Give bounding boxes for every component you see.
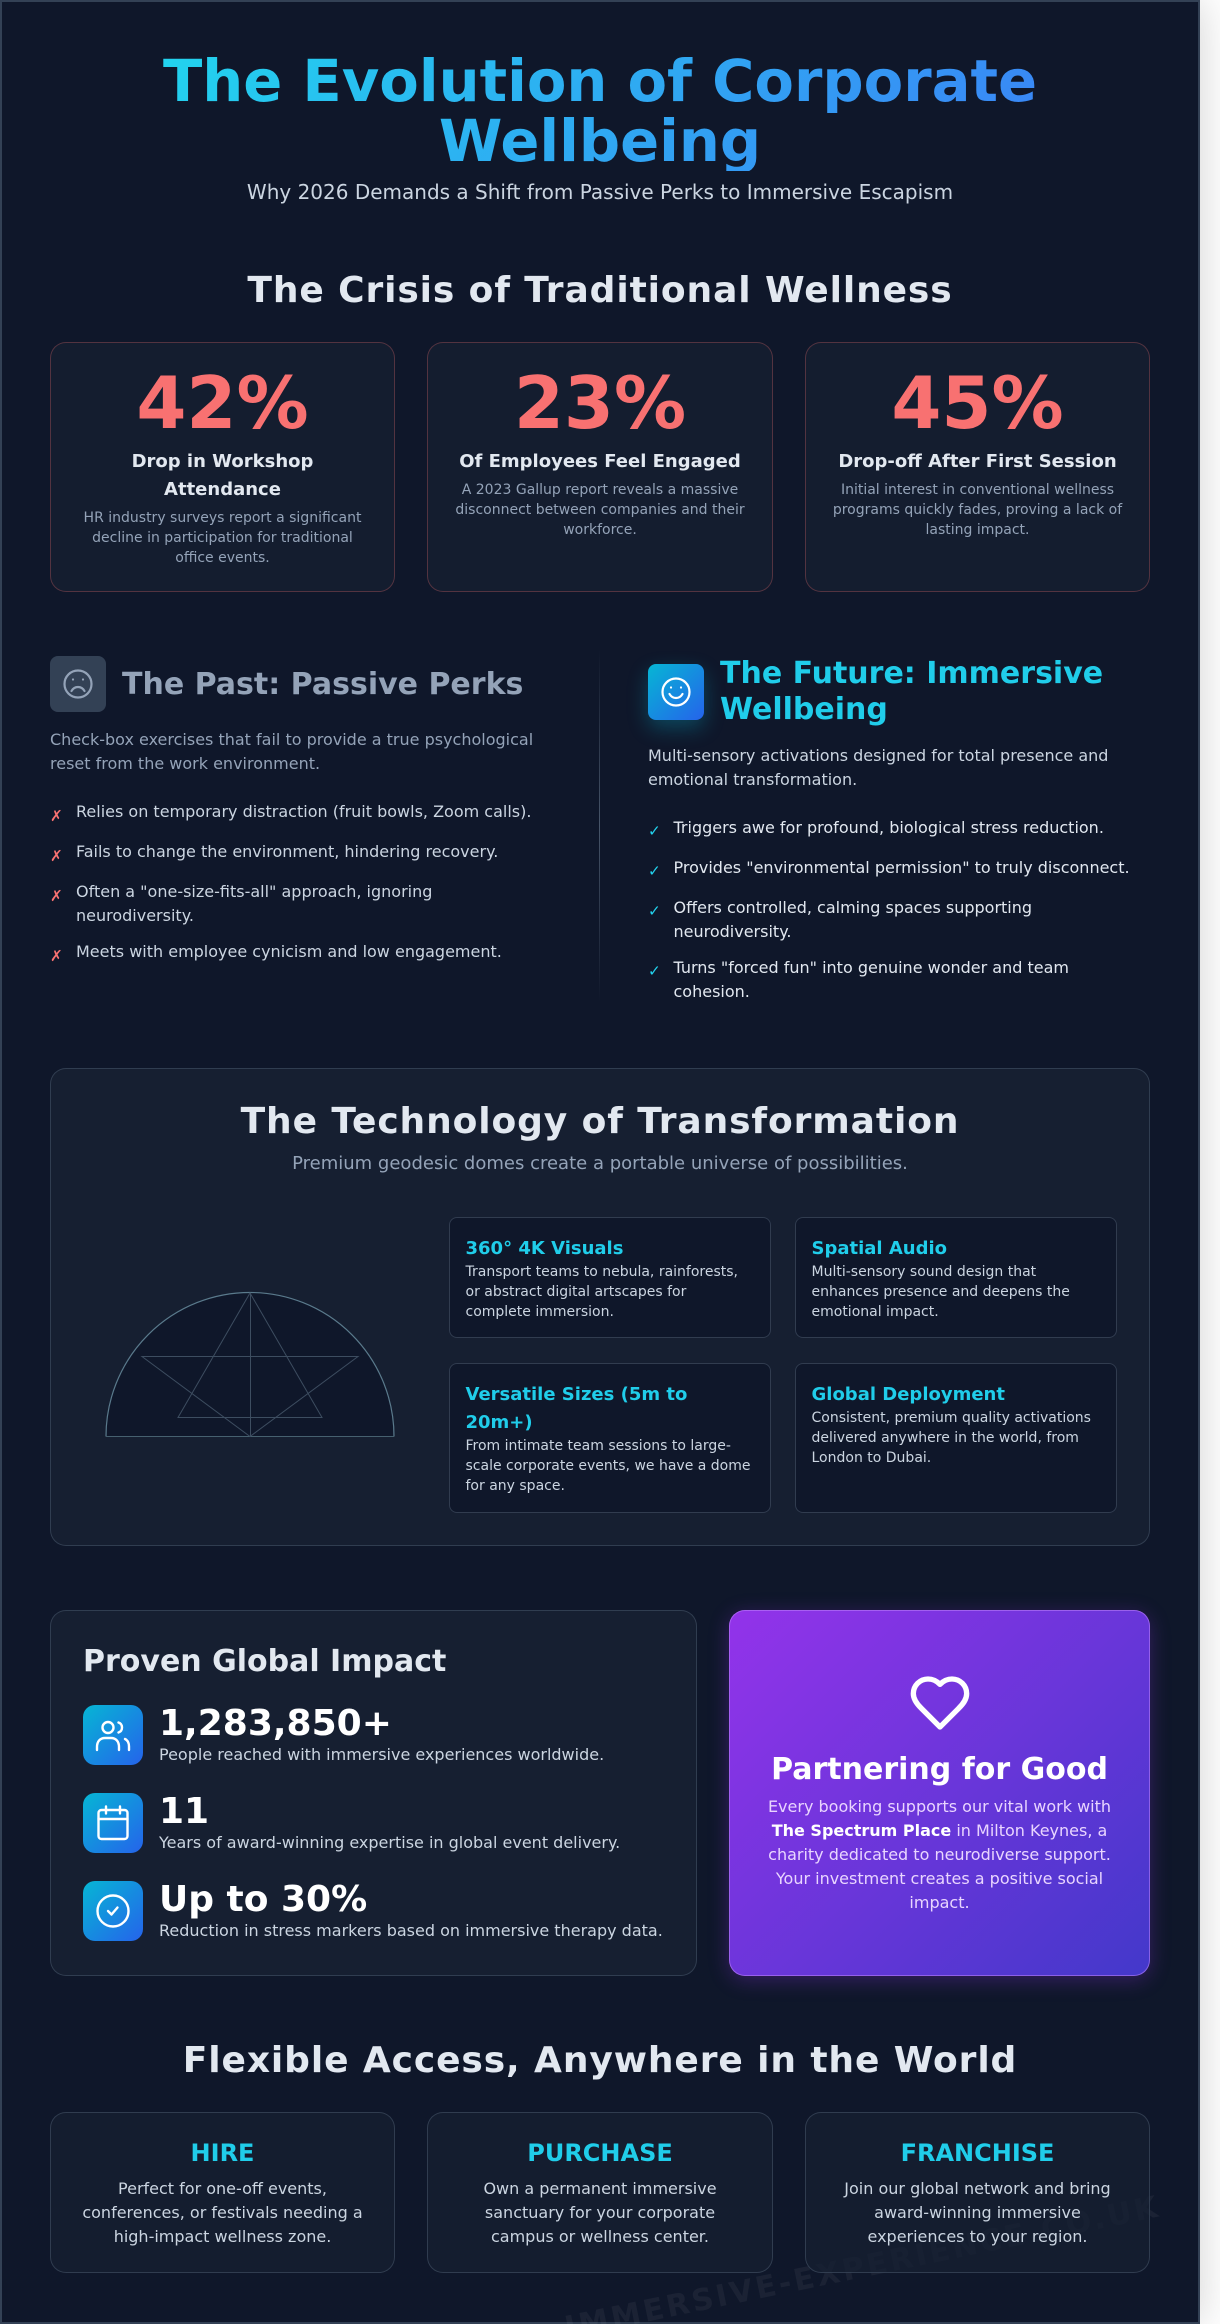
option text: high-impact wellness zone. [114,2227,331,2246]
feature text: emotional impact. [812,1304,939,1320]
text: past intro: Check-box exercises that fail to provide a true psychological [50,730,533,749]
option text: sanctuary for your corporate [485,2203,715,2222]
stat description: disconnect between companies and their [455,502,745,518]
stat number: 42% [136,361,309,445]
bullet item 2: Fails to change the environment, hindering recovery. [76,842,498,861]
text: charity description: charity dedicated to neurodiverse support. [768,1845,1111,1864]
text: charity description: impact. [909,1893,970,1912]
feature text: for any space. [466,1478,565,1494]
title [163,52,1037,171]
stat: stress reduction: Up to 30% [159,1879,367,1920]
stat number: 23% [514,361,686,445]
option text: Join our global network and bring [844,2179,1111,2198]
stat description [455,482,745,538]
feature text [812,1264,1070,1320]
bullet item 4: ✗ [50,947,63,965]
panel: proven global impact [50,1610,697,1976]
panel: hire [50,2112,395,2273]
option text: campus or wellness center. [491,2227,709,2246]
option text [843,2179,1111,2246]
bullet item 3: Often a "one-size-fits-all" approach, ignoring [76,882,432,901]
panel: franchise [805,2112,1150,2273]
bullet item 4 [648,958,1069,1001]
heading: flexible access: Flexible Access, Anywhere in the World [183,2040,1017,2081]
bullet item 3: Offers controlled, calming spaces supporting [674,898,1032,917]
stat number: 45% [891,361,1064,445]
feature text: Consistent, premium quality activations [812,1410,1091,1426]
stat description: programs quickly fades, proving a lack of [833,502,1122,518]
panel: purchase [427,2112,773,2273]
stat description: lasting impact. [926,522,1029,538]
bullet item 2: Provides "environmental permission" to truly disconnect. [674,858,1130,877]
stat title [132,451,313,500]
option text: award-winning immersive [874,2203,1081,2222]
feature text [466,1438,750,1494]
feature text: enhances presence and deepens the [812,1284,1070,1300]
feature text: complete immersion. [466,1304,614,1320]
bullet item 3 [50,882,432,925]
option text [82,2179,363,2246]
bullet item 4: cohesion. [674,982,750,1001]
panel: 42% stat card [50,342,395,592]
text: charity description: The Spectrum Place in Milton Keynes, a [772,1821,1107,1840]
feature title [466,1384,687,1433]
option text: Perfect for one-off events, [118,2179,327,2198]
heading: the future: Wellbeing [720,692,888,727]
text: past intro [50,730,533,773]
text: technology subtitle: Premium geodesic domes create a portable universe of possibilities. [292,1153,908,1174]
feature card: 360 visuals [449,1217,771,1338]
feature card: spatial audio [795,1217,1117,1338]
text: past intro: reset from the work environment. [50,754,320,773]
feature text: Transport teams to nebula, rainforests, [466,1264,738,1280]
stat description: A 2023 Gallup report reveals a massive [462,482,738,498]
text: charity description [768,1797,1111,1912]
option title: PURCHASE [527,2139,673,2167]
bullet item 3: neurodiversity. [674,922,791,941]
feature text: London to Dubai. [812,1450,931,1466]
stat label: Reduction in stress markers based on immersive therapy data. [159,1921,663,1940]
title: The Evolution of Corporate [163,48,1037,115]
text: future intro: Multi-sensory activations designed for total presence and [648,746,1108,765]
heading: impact: Proven Global Impact [83,1644,446,1679]
list: future benefits [648,818,1130,1001]
stat description: workforce. [563,522,637,538]
bullet item 4: ✓ [648,962,661,980]
bullet item 1: Relies on temporary distraction (fruit bowls, Zoom calls). [76,802,531,821]
stat description: decline in participation for traditional [92,530,353,546]
feature text: From intimate team sessions to large- [466,1438,731,1454]
feature text: delivered anywhere in the world, from [812,1430,1079,1446]
bullet item 2: ✗ [50,847,63,865]
panel: 23% stat card [427,342,773,592]
heading: technology: The Technology of Transformation [241,1101,959,1142]
icon: calendar [83,1793,143,1853]
text: charity description: Every booking supports our vital work with [768,1797,1111,1816]
feature title: 20m+) [466,1412,533,1433]
heading: the future [720,656,1103,727]
option text: Own a permanent immersive [483,2179,717,2198]
bullet item 4: Meets with employee cynicism and low engagement. [76,942,502,961]
text: future intro [648,746,1108,789]
option title: FRANCHISE [901,2139,1054,2167]
bullet item 3 [648,898,1032,941]
panel: 45% stat card [805,342,1150,592]
option title: HIRE [191,2139,254,2167]
text: future intro: emotional transformation. [648,770,857,789]
stat title: Drop in Workshop [132,451,313,472]
bullet item 3: ✓ [648,902,661,920]
heading: partnering: Partnering for Good [771,1752,1108,1787]
heading: the past: The Past: Passive Perks [122,667,523,702]
stat description: office events. [175,550,270,566]
stat description [84,510,362,566]
option text [483,2179,717,2246]
icon: people [83,1705,143,1765]
bullet item 3: ✗ [50,887,63,905]
feature text: or abstract digital artscapes for [466,1284,686,1300]
feature card: global deployment [795,1363,1117,1513]
bullet item 1: ✓ [648,822,661,840]
stat title: Drop-off After First Session [838,451,1117,472]
subtitle: Why 2026 Demands a Shift from Passive Perks to Immersive Escapism [247,180,953,204]
stat label: Years of award-winning expertise in global event delivery. [159,1833,620,1852]
option text: conferences, or festivals needing a [82,2203,363,2222]
icon: happy face [648,664,704,720]
text: charity description: Your investment creates a positive social [776,1869,1103,1888]
bullet item 1: ✗ [50,807,63,825]
feature title: Spatial Audio [812,1238,947,1259]
icon: heart [910,1676,970,1730]
feature text [465,1264,738,1320]
bullet item 1: Triggers awe for profound, biological stress reduction. [674,818,1104,837]
feature text [812,1410,1091,1466]
stat: people reached: 1,283,850+ [159,1703,392,1744]
icon: check circle [83,1881,143,1941]
stat label: People reached with immersive experiences worldwide. [159,1745,604,1764]
feature text: Multi-sensory sound design that [812,1264,1036,1280]
feature title: Versatile Sizes (5m to [466,1384,687,1405]
bullet item 3: neurodiversity. [76,906,194,925]
heading: the future: The Future: Immersive [720,656,1103,691]
title: Wellbeing [439,108,761,174]
bullet item 4: Turns "forced fun" into genuine wonder and team [674,958,1069,977]
diagram: geodesic dome [105,1292,395,1437]
feature text: scale corporate events, we have a dome [466,1458,750,1474]
icon: sad face [50,656,106,712]
list: past drawbacks [50,802,531,965]
bullet item 2: ✓ [648,862,661,880]
option text: experiences to your region. [868,2227,1088,2246]
feature card: versatile sizes [449,1363,771,1513]
panel: partnering for good [729,1610,1150,1976]
heading: crisis: The Crisis of Traditional Wellness [247,270,953,311]
stat description [833,482,1122,538]
panel: technology of transformation [50,1068,1150,1546]
stat: years of expertise: 11 [159,1791,209,1832]
stat title: Attendance [164,479,281,500]
stat description: Initial interest in conventional wellness [841,482,1114,498]
stat description: HR industry surveys report a significant [84,510,361,526]
feature title: 360° 4K Visuals [466,1238,623,1259]
feature title: Global Deployment [812,1384,1005,1405]
stat title: Of Employees Feel Engaged [459,451,741,472]
